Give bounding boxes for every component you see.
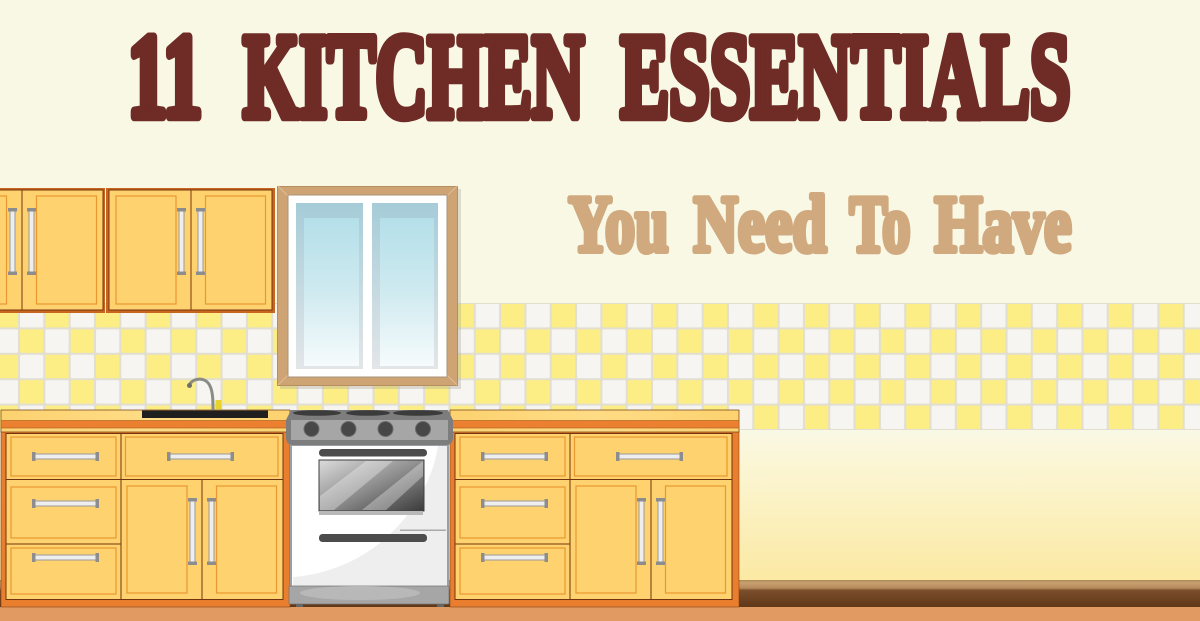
lower wall gradient <box>0 430 1200 580</box>
title: 11 <box>128 9 202 143</box>
baseboard <box>0 580 1200 607</box>
stove <box>286 410 453 607</box>
subtitle: To <box>850 179 910 268</box>
sink <box>142 379 268 418</box>
title: KITCHEN <box>243 9 584 143</box>
subtitle: Need <box>694 179 827 268</box>
subtitle: You <box>568 179 668 268</box>
base cabinet left <box>1 431 290 607</box>
base cabinet right <box>450 431 739 607</box>
countertop left <box>1 410 290 432</box>
window <box>278 186 461 389</box>
upper cabinet right <box>106 188 275 313</box>
subtitle <box>568 179 1072 268</box>
tile backsplash <box>0 303 1200 430</box>
countertop right <box>450 410 739 432</box>
floor <box>0 607 1200 621</box>
upper cabinet left <box>0 188 105 313</box>
